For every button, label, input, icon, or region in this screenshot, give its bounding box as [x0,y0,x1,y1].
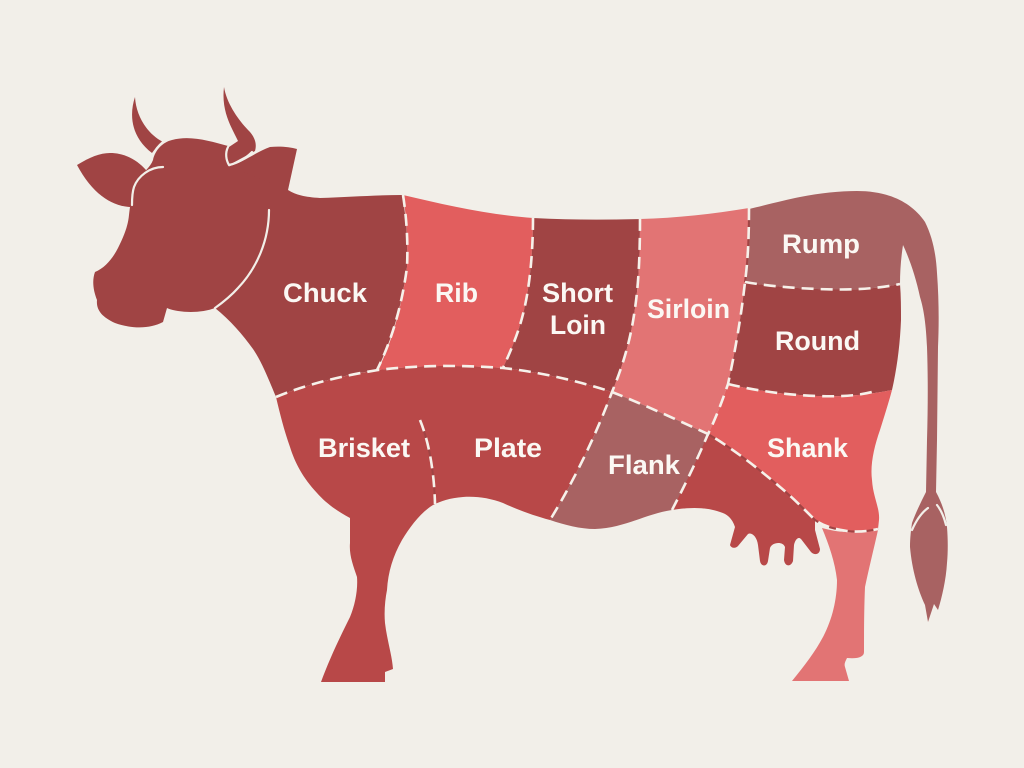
left ear [77,153,146,207]
label: Flank: Flank [608,450,681,480]
label: Rump: Rump [782,229,860,259]
panel: chuck cut [93,138,407,397]
panel: brisket and plate with front leg [276,366,612,682]
left horn [132,97,163,153]
label: Sirloin: Sirloin [647,294,730,324]
panel: shank cut [708,384,892,532]
icon: cow head [77,87,297,207]
label: Brisket: Brisket [318,433,410,463]
dashed cut lines [276,195,900,532]
panel: lower hind leg [792,528,878,681]
label: Shank: Shank [767,433,849,463]
label: Rib: Rib [435,278,478,308]
label: Plate: Plate [474,433,542,463]
label: Short Loin: Loin [550,310,606,340]
panel: rib cut [378,195,533,370]
panel: round cut [728,282,901,396]
right horn [223,87,256,165]
panel: udder and belly [672,434,820,566]
label: Round: Round [775,326,860,356]
panel: rump cut with tail [745,191,948,622]
panel: short loin cut [503,218,640,392]
panel: flank cut [550,392,708,529]
label: Chuck: Chuck [283,278,368,308]
panel: sirloin cut [612,208,749,434]
right ear [230,147,297,200]
label: Short Loin: Short [542,278,613,308]
